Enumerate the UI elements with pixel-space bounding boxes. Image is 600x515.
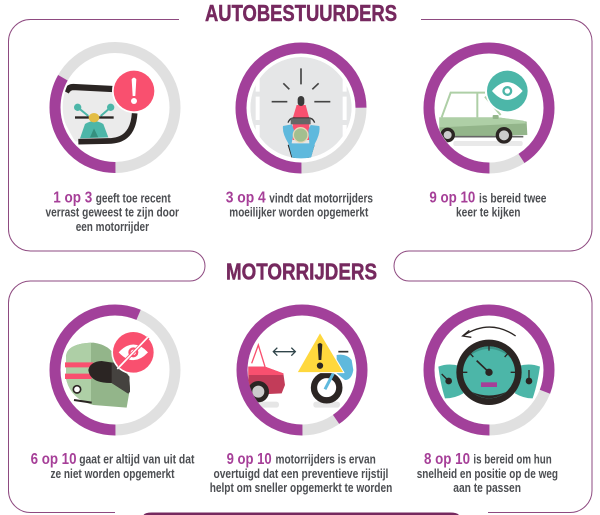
- stat 3 text: [429, 190, 547, 220]
- icon: car with eye: [439, 69, 529, 146]
- stat 6 text: is bereid om hun: [473, 453, 552, 467]
- stat 1 text: verrast geweest te zijn door: [46, 206, 179, 220]
- stat 5 text: motorrijders is ervan: [276, 453, 376, 467]
- icon: scooter seen from car with warning: [62, 69, 156, 142]
- stat 1 ring: 1 op 3: [55, 48, 175, 168]
- stat 1 text: 1 op 3: [53, 190, 92, 207]
- stat 5 text: overtuigd dat een preventieve rijstijl: [214, 467, 388, 481]
- icon: helmet with crossed eye: [65, 330, 155, 408]
- stat 4 text: [31, 451, 195, 481]
- stat 6 text: [417, 451, 558, 495]
- stat 3 text: 9 op 10: [429, 190, 475, 207]
- stat 2 text: moeilijker worden opgemerkt: [229, 206, 369, 220]
- stat 2 text: vindt dat motorrijders: [269, 192, 373, 206]
- stat 2 text: 3 op 4: [226, 190, 266, 207]
- heading: autobestuurders: AUTOBESTUURDERS: [205, 0, 397, 26]
- stat 4 text: 6 op 10: [31, 451, 77, 468]
- stat 2 text: [226, 190, 373, 220]
- stat 1 text: een motorrijder: [76, 220, 149, 234]
- stat 5 text: helpt om sneller opgemerkt te worden: [210, 481, 392, 495]
- stat 1 text: [46, 190, 179, 234]
- stat 3 text: keer te kijken: [456, 206, 520, 220]
- stat 3 text: is bereid twee: [479, 192, 547, 206]
- stat 3 ring: 9 op 10: [429, 48, 549, 168]
- stat 6 ring: 8 op 10: [429, 310, 549, 430]
- icon: motorcyclist from above: [250, 57, 352, 159]
- stat 4 text: ze niet worden opgemerkt: [50, 467, 175, 481]
- stat 6 text: aan te passen: [453, 481, 521, 495]
- icon: car, distance arrow, warning triangle, motorcycle: [248, 332, 353, 408]
- heading: motorrijders: MOTORRIJDERS: [226, 258, 377, 284]
- stat 1 text: geeft toe recent: [96, 192, 171, 206]
- stat 4 ring: 6 op 10: [55, 310, 175, 430]
- stat 5 text: 9 op 10: [227, 451, 272, 468]
- stat 5 ring: 9 op 10: [242, 310, 362, 430]
- stat 6 text: 8 op 10: [424, 451, 470, 468]
- icon: speedometer: [438, 327, 540, 405]
- stat 6 text: snelheid en positie op de weg: [417, 467, 558, 481]
- stat 2 ring: 3 op 4: [241, 48, 361, 168]
- bottom bar: [144, 512, 459, 515]
- stat 5 text: [210, 451, 392, 495]
- stat 4 text: gaat er altijd van uit dat: [79, 453, 195, 467]
